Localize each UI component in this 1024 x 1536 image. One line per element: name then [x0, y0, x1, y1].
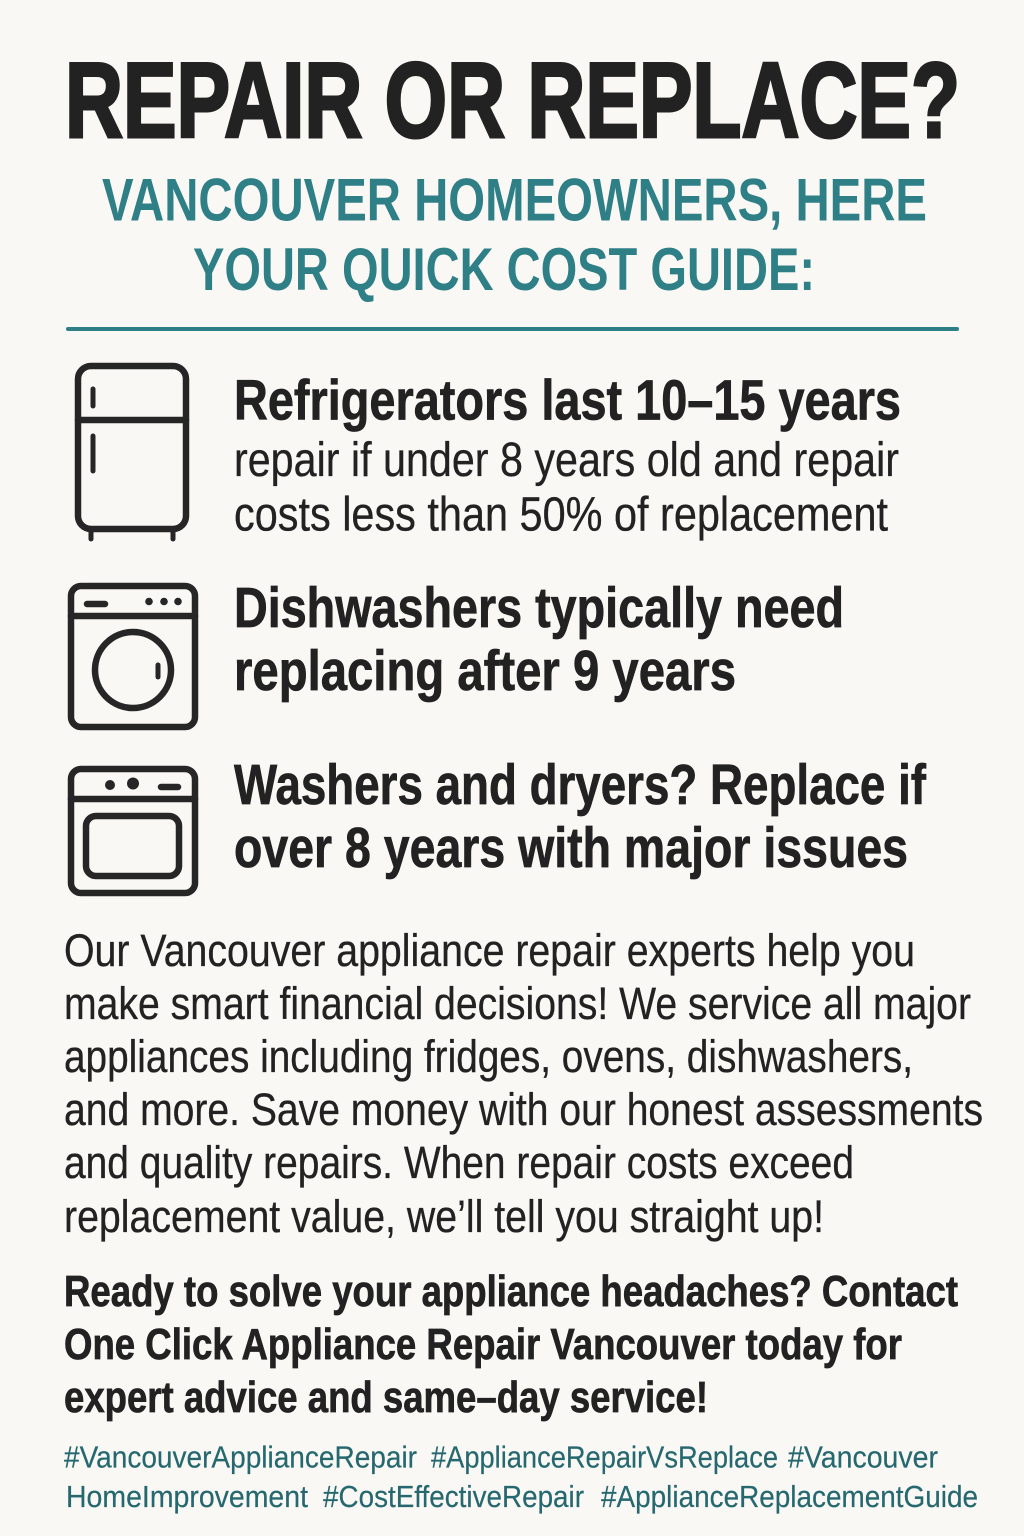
subtitle: YOUR QUICK COST GUIDE:: [193, 236, 815, 303]
hashtags: #ApplianceReplacementGuide: [601, 1479, 978, 1514]
row: washers and dryers: [71, 753, 927, 893]
icon: dishwasher: [71, 586, 195, 727]
heading: washers and dryers: [234, 753, 927, 880]
subtitle: [102, 166, 927, 303]
body paragraph: and quality repairs. When repair costs exceed: [64, 1137, 854, 1188]
icon: refrigerator: [78, 366, 186, 539]
text: refrigerator advice: costs less than 50% of replacement: [234, 488, 888, 542]
call to action: expert advice and same–day service!: [64, 1373, 708, 1422]
hashtags: [64, 1440, 978, 1514]
heading: refrigerators: Refrigerators last 10–15 years: [234, 368, 901, 432]
icon: oven: [71, 769, 195, 893]
hashtags: HomeImprovement: [66, 1479, 308, 1514]
hashtags: #CostEffectiveRepair: [323, 1479, 584, 1514]
heading: dishwashers: Dishwashers typically need: [234, 576, 844, 640]
body paragraph: Our Vancouver appliance repair experts help you: [64, 925, 915, 976]
hashtags: #Vancouver: [788, 1440, 938, 1474]
row: dishwashers: [71, 576, 844, 727]
call to action: [64, 1267, 958, 1422]
hashtags: #VancouverApplianceRepair: [64, 1440, 417, 1474]
hashtags: #ApplianceRepairVsReplace: [431, 1440, 778, 1474]
body paragraph: appliances including fridges, ovens, dishwashers,: [64, 1031, 913, 1082]
row: refrigerators: [78, 366, 901, 542]
body paragraph: replacement value, we’ll tell you straight up!: [64, 1191, 824, 1242]
body paragraph: [64, 925, 983, 1242]
text: refrigerator advice: repair if under 8 years old and repair: [234, 434, 899, 487]
heading: dishwashers: [234, 576, 844, 703]
text: refrigerator advice: [234, 434, 899, 542]
heading: dishwashers: replacing after 9 years: [234, 639, 736, 703]
